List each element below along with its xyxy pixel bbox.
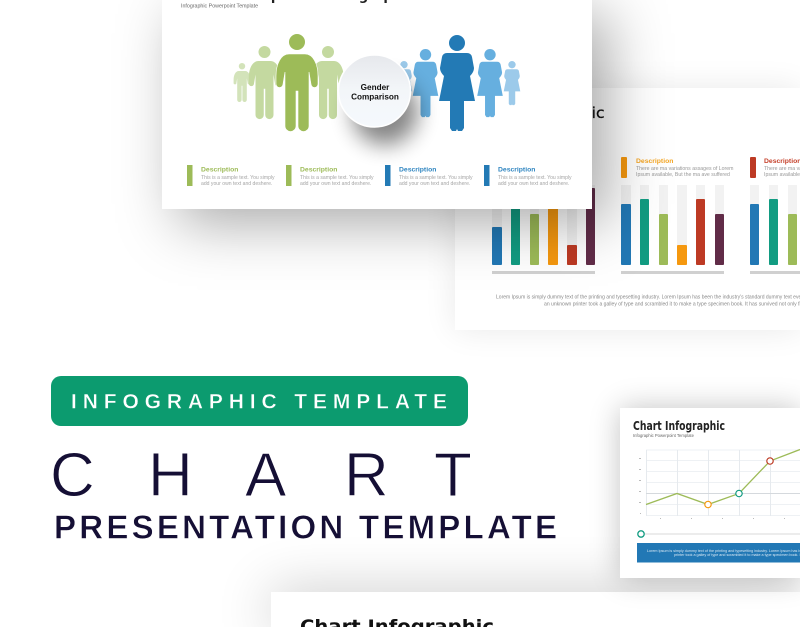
description 4 <box>484 165 572 187</box>
icon: small green figure <box>234 63 250 102</box>
description 2: add your own text and deshere. <box>300 181 371 187</box>
icon: large green figure <box>276 34 318 132</box>
description 2 <box>286 165 374 187</box>
description 2: This is a sample text. You simply <box>300 175 374 181</box>
green badge <box>51 376 468 426</box>
description 3 <box>385 165 473 187</box>
icon: medium blue figure left <box>413 49 438 117</box>
icon: large blue figure <box>439 35 475 131</box>
description 3: This is a sample text. You simply <box>399 175 473 181</box>
description 3: Description <box>399 166 436 174</box>
description 1: Description <box>201 166 238 174</box>
bar slide title: Chart Infographic <box>469 104 604 122</box>
gender slide subtitle: Infographic Powerpoint Template <box>181 4 258 10</box>
green badge: INFOGRAPHIC TEMPLATE <box>71 390 447 414</box>
blue text box <box>637 543 800 562</box>
description 3: add your own text and deshere. <box>399 181 470 187</box>
heading: chart: CHART <box>50 441 472 510</box>
legend: orange description: Description <box>636 158 673 165</box>
panel: bottom slide <box>271 592 800 627</box>
icon: medium green figure left <box>249 46 280 119</box>
panel: gender comparison slide <box>162 0 592 209</box>
panel: line chart slide <box>620 408 800 578</box>
description 1: This is a sample text. You simply <box>201 175 275 181</box>
bar chart: third group <box>750 185 800 274</box>
bar chart: second group <box>621 185 724 274</box>
line chart slide title: Chart Infographic <box>633 419 725 433</box>
lorem ipsum paragraph <box>496 294 800 308</box>
headline block <box>50 376 557 546</box>
legend: red description <box>750 157 800 178</box>
description 1: add your own text and deshere. <box>201 181 272 187</box>
line chart slide subtitle: Infographic Powerpoint Template <box>633 433 695 438</box>
icon: medium blue figure right <box>477 49 503 117</box>
description 4: add your own text and deshere. <box>498 181 569 187</box>
line chart <box>639 450 800 519</box>
description 2: Description <box>300 166 337 174</box>
legend: orange description: There are ma variations assages of Lorem <box>636 166 733 172</box>
description 4: Description <box>498 166 535 174</box>
center circle badge <box>338 55 418 145</box>
description 4: This is a sample text. You simply <box>498 175 572 181</box>
icon: hidden small blue figure <box>396 61 412 105</box>
slider track <box>638 531 800 537</box>
center circle badge: Gender <box>361 83 390 92</box>
description 1 <box>187 165 275 187</box>
icon: medium green figure right <box>312 46 344 119</box>
legend: orange description: Ipsum available, But the ma ave suffered <box>636 172 730 178</box>
legend: orange description <box>621 157 733 178</box>
heading: presentation template: PRESENTATION TEMPLATE <box>54 508 557 546</box>
center circle badge: Comparison <box>351 92 399 102</box>
panel: bar chart slide <box>455 88 800 330</box>
icon: small blue figure right <box>504 61 520 105</box>
bar chart: first group <box>492 185 595 274</box>
